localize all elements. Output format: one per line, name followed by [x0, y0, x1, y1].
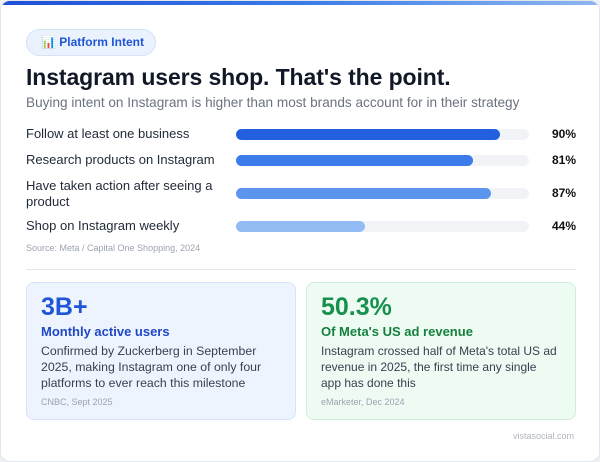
stat box: 3B+	[26, 282, 296, 420]
bar chart: product	[26, 194, 69, 209]
source: Source: Meta / Capital One Shopping, 2024	[26, 243, 200, 253]
bar: taken action	[26, 178, 576, 209]
footer: vistasocial.com	[513, 431, 574, 441]
stat box: 50.3%: 50.3%	[321, 293, 392, 321]
title: Instagram users shop. That's the point.	[26, 64, 451, 90]
badge: Platform Intent: 📊 Platform Intent	[41, 35, 144, 49]
bar chart: 87%	[552, 186, 576, 200]
stat box: 3B+: Monthly active users	[41, 324, 170, 339]
bar chart: 81%	[552, 153, 576, 167]
badge: Platform Intent	[26, 29, 156, 56]
stat box: 3B+: 3B+	[41, 293, 88, 321]
stat box: 3B+: CNBC, Sept 2025	[41, 397, 113, 407]
stat box: 3B+: Confirmed by Zuckerberg in September 2025, making Instagram one of only four platforms to ever reach this milestone	[41, 344, 261, 390]
bar chart: Have taken action after seeing a	[26, 178, 212, 193]
bar chart: Shop on Instagram weekly	[26, 218, 179, 233]
bar: shop weekly	[26, 218, 576, 233]
stat box: 50.3%: eMarketer, Dec 2024	[321, 397, 405, 407]
bar: research products	[26, 152, 576, 167]
bar chart: Research products on Instagram	[26, 152, 215, 167]
stat box: 50.3%: Of Meta's US ad revenue	[321, 324, 473, 339]
stat box: 50.3%: revenue in 2025, the first time any single	[321, 360, 536, 374]
bar chart: Follow at least one business	[26, 126, 189, 141]
stat box: 50.3%: Instagram crossed half of Meta's total US ad	[321, 344, 557, 358]
bar: follow business	[26, 126, 576, 141]
bar chart: 90%	[552, 127, 576, 141]
bar chart	[26, 126, 576, 233]
stat box: 50.3%: app has done this	[321, 376, 416, 390]
bar chart: 44%	[552, 219, 576, 233]
subtitle: Buying intent on Instagram is higher than most brands account for in their strategy	[26, 95, 519, 110]
stat box: 50.3%	[306, 282, 576, 420]
